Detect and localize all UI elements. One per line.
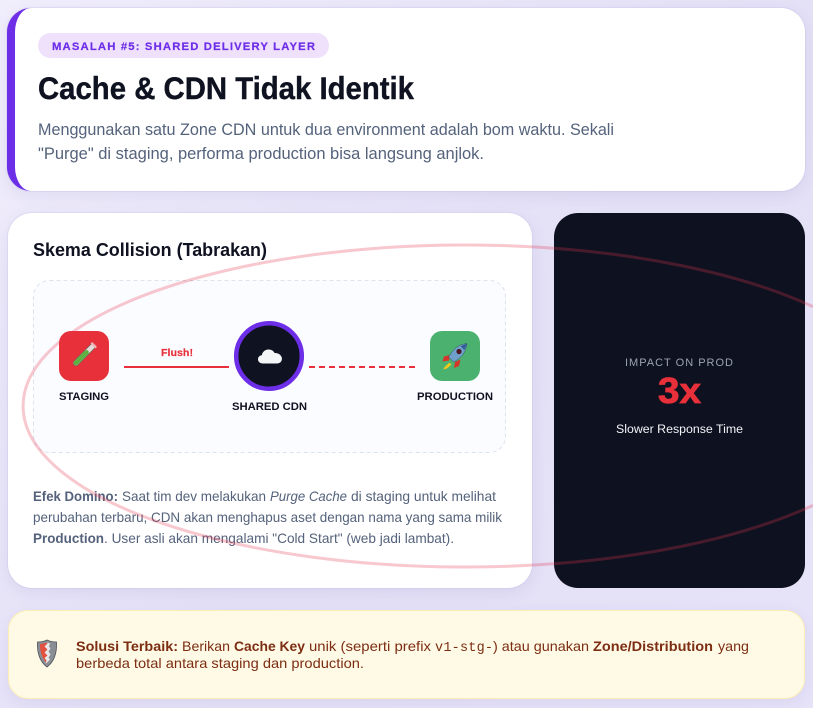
title: Cache & CDN Tidak Identik bbox=[38, 70, 414, 106]
staging node bbox=[59, 331, 109, 403]
callout: solution bbox=[8, 610, 805, 699]
production node bbox=[417, 331, 493, 403]
icon: test tube bbox=[72, 342, 97, 367]
panel: header bbox=[7, 8, 805, 191]
solution text: Cache Key bbox=[234, 639, 305, 654]
solution text: ) atau gunakan bbox=[493, 639, 589, 654]
panel: impact stat bbox=[554, 213, 805, 588]
explanation text: Saat tim dev melakukan bbox=[122, 489, 266, 504]
diagram area bbox=[34, 280, 506, 452]
explanation text: Production bbox=[33, 531, 104, 546]
description: "Purge" di staging, performa production bisa langsung anjlok. bbox=[38, 144, 484, 163]
solution text: unik (seperti prefix bbox=[309, 639, 431, 654]
impact caption: Slower Response Time bbox=[616, 422, 743, 436]
panel heading: Skema Collision (Tabrakan) bbox=[33, 239, 267, 260]
explanation text bbox=[33, 489, 502, 546]
icon: shield bbox=[37, 640, 57, 667]
impact label: IMPACT ON PROD bbox=[625, 357, 733, 369]
badge bbox=[38, 33, 329, 58]
explanation text: perubahan terbaru, CDN akan menghapus aset dengan nama yang sama milik bbox=[33, 510, 502, 525]
solution text: Berikan bbox=[182, 639, 230, 654]
shared cdn node bbox=[232, 323, 307, 413]
solution text: Zone/Distribution bbox=[593, 639, 713, 654]
description: Menggunakan satu Zone CDN untuk dua environment adalah bom waktu. Sekali bbox=[38, 120, 614, 139]
explanation text: Purge Cache bbox=[270, 489, 347, 504]
production node: PRODUCTION bbox=[417, 391, 493, 403]
arrow: dashed line bbox=[309, 366, 415, 368]
icon: rocket bbox=[442, 344, 467, 370]
panel: collision diagram bbox=[8, 213, 532, 588]
arrow: flush line bbox=[124, 347, 229, 368]
explanation text: . User asli akan mengalami "Cold Start" (web jadi lambat). bbox=[104, 531, 454, 546]
explanation text: Efek Domino: bbox=[33, 489, 118, 504]
icon: cloud bbox=[258, 349, 282, 364]
solution text: Solusi Terbaik: bbox=[76, 639, 178, 654]
shared cdn node: SHARED CDN bbox=[232, 401, 307, 413]
solution text bbox=[76, 639, 749, 671]
staging node: STAGING bbox=[59, 391, 109, 403]
solution text: yang bbox=[718, 639, 749, 654]
badge: MASALAH #5: SHARED DELIVERY LAYER bbox=[52, 41, 315, 53]
description bbox=[38, 120, 614, 163]
impact value: 3x bbox=[658, 370, 701, 411]
solution text: berbeda total antara staging dan production. bbox=[76, 656, 364, 671]
explanation text: di staging untuk melihat bbox=[351, 489, 496, 504]
arrow: flush line: Flush! bbox=[161, 347, 193, 359]
solution text: v1-stg- bbox=[435, 641, 493, 656]
